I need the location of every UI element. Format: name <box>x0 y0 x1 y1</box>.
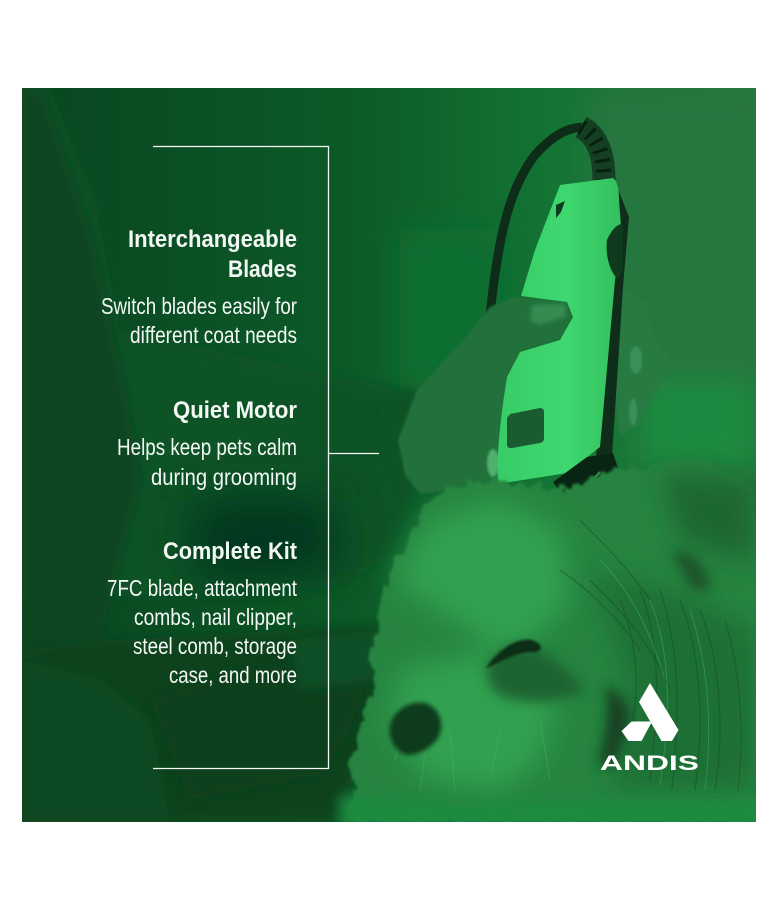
feature: Quiet Motor: Quiet Motor <box>173 397 297 424</box>
logo: ANDIS: ANDIS <box>600 752 699 775</box>
feature: Quiet Motor: Helps keep pets calm <box>117 434 297 460</box>
feature: Interchangeable Blades: Blades <box>228 256 297 283</box>
clipper logo mark <box>556 201 565 218</box>
panel: green photo background <box>22 88 760 826</box>
dog fur strands <box>560 520 741 790</box>
clipper power switch <box>607 224 623 278</box>
logo: ANDIS <box>600 683 699 775</box>
bracket frame with pointer <box>153 146 379 768</box>
dog eye <box>486 645 585 702</box>
clipper cable <box>490 127 604 315</box>
feature: Interchangeable Blades <box>101 226 297 348</box>
clipper blade <box>553 453 618 493</box>
clipper body <box>497 178 629 507</box>
feature: Complete Kit: combs, nail clipper, <box>134 604 297 630</box>
dog body and fur <box>340 458 760 826</box>
wall shading <box>400 88 756 470</box>
feature: Complete Kit: steel comb, storage <box>133 633 297 659</box>
infographic canvas <box>22 88 756 822</box>
feature: Complete Kit <box>107 538 297 688</box>
dog neck shadow <box>598 685 629 765</box>
feature: Complete Kit: 7FC blade, attachment <box>107 575 297 601</box>
feature: Interchangeable Blades: Interchangeable <box>128 226 297 253</box>
hand holding the clipper <box>398 297 657 494</box>
feature: Quiet Motor: during grooming <box>151 464 297 490</box>
feature: Complete Kit: case, and more <box>169 662 297 688</box>
dog nose <box>389 702 441 755</box>
feature: Quiet Motor <box>117 397 297 490</box>
feature: Complete Kit: Complete Kit <box>163 538 297 565</box>
clipper button <box>507 408 544 448</box>
feature: Interchangeable Blades: Switch blades easily for <box>101 293 297 319</box>
person: sleeve and arm <box>22 88 415 822</box>
feature: Interchangeable Blades: different coat needs <box>130 322 297 348</box>
